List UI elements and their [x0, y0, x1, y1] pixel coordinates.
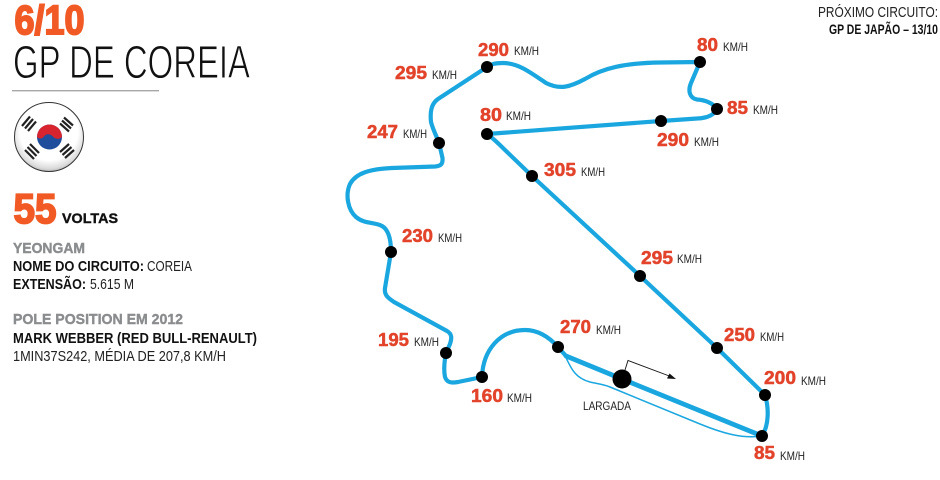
track map [348, 62, 768, 437]
next circuit note [818, 4, 938, 37]
circuit info block: EXTENSÃO: [13, 275, 86, 293]
speed label: 80 top: KM/H [723, 40, 748, 54]
speed label: 270: 270 [560, 317, 591, 337]
start-finish straight [566, 356, 762, 436]
pole position block: MARK WEBBER (RED BULL-RENAULT) [13, 330, 257, 347]
speed label: 247: KM/H [403, 127, 427, 141]
pole position block: 1MIN37S242, MÉDIA DE 207,8 KM/H [13, 348, 226, 365]
speed label: 85: 85 [727, 98, 748, 118]
speed label: 305 [544, 160, 605, 180]
checkpoint markers [385, 56, 771, 442]
speed label: 270: KM/H [596, 323, 621, 337]
speed label: 290 lower [657, 130, 719, 150]
speed label: 85 bottom: 85 [754, 443, 775, 463]
speed label: 85 bottom: KM/H [780, 449, 805, 463]
icon: South Korea flag badge [14, 102, 84, 172]
speed label: 160 [471, 386, 532, 406]
speed label: 80: 80 [480, 105, 502, 125]
speed label: 80 top [697, 35, 748, 55]
circuit info block: YEONGAM [13, 240, 85, 257]
speed label: 270 [560, 317, 621, 337]
title: GP DE COREIA [13, 36, 250, 88]
arrow: race direction [625, 360, 676, 379]
circuit info block: NOME DO CIRCUITO: [13, 258, 144, 275]
speed label: 200 [764, 368, 826, 388]
speed label: 250: KM/H [760, 330, 784, 344]
pole position block [13, 311, 257, 365]
laps stat: VOLTAS [62, 210, 118, 226]
speed label: 230: KM/H [438, 231, 462, 245]
speed label: 290 lower: KM/H [694, 135, 719, 149]
speed label: 195 [378, 330, 439, 350]
speed label: 195: 195 [378, 330, 409, 350]
speed label: 200: 200 [764, 368, 796, 388]
speed label: 250 [724, 325, 784, 345]
speed label: 200: KM/H [801, 374, 826, 388]
speed label: 80: KM/H [506, 109, 531, 123]
start label: LARGADA [583, 401, 631, 413]
speed label: 80 [480, 105, 531, 125]
speed label: 160: KM/H [507, 391, 532, 405]
speed label: 305: KM/H [581, 165, 605, 179]
circuit info block: COREIA [147, 258, 192, 275]
circuit info block [13, 240, 192, 293]
speed label: 160: 160 [471, 386, 503, 406]
speed label: 295: KM/H [432, 68, 457, 82]
speed label: 195: KM/H [414, 335, 439, 349]
speed label: 290: KM/H [514, 44, 539, 58]
speed label: 85 [727, 98, 778, 118]
speed label: 295 right: 295 [641, 248, 673, 268]
speed label: 85: KM/H [753, 103, 778, 117]
speed label: 250: 250 [724, 325, 755, 345]
speed label: 305: 305 [544, 160, 576, 180]
speed label: 295: 295 [395, 63, 427, 83]
speed label: 290 [478, 40, 539, 60]
laps stat: 55 [14, 185, 56, 232]
speed label: 295 right [641, 248, 702, 268]
speed label: 85 bottom [754, 443, 805, 463]
main circuit line [348, 62, 717, 382]
pit lane [564, 354, 762, 437]
circuit info block: 5.615 M [90, 276, 134, 293]
laps stat [14, 185, 118, 232]
speed label: 247: 247 [367, 122, 398, 142]
speed label: 295 [395, 63, 457, 83]
speed label: 247 [367, 122, 427, 142]
speed label: 230 [402, 226, 462, 246]
speed label: 290: 290 [478, 40, 509, 60]
speed label: 290 lower: 290 [657, 130, 689, 150]
return section [487, 134, 768, 436]
speed label: 230: 230 [402, 226, 433, 246]
speed label: 295 right: KM/H [677, 252, 702, 266]
pole position block: POLE POSITION EM 2012 [13, 311, 183, 328]
speed label: 80 top: 80 [697, 35, 718, 55]
